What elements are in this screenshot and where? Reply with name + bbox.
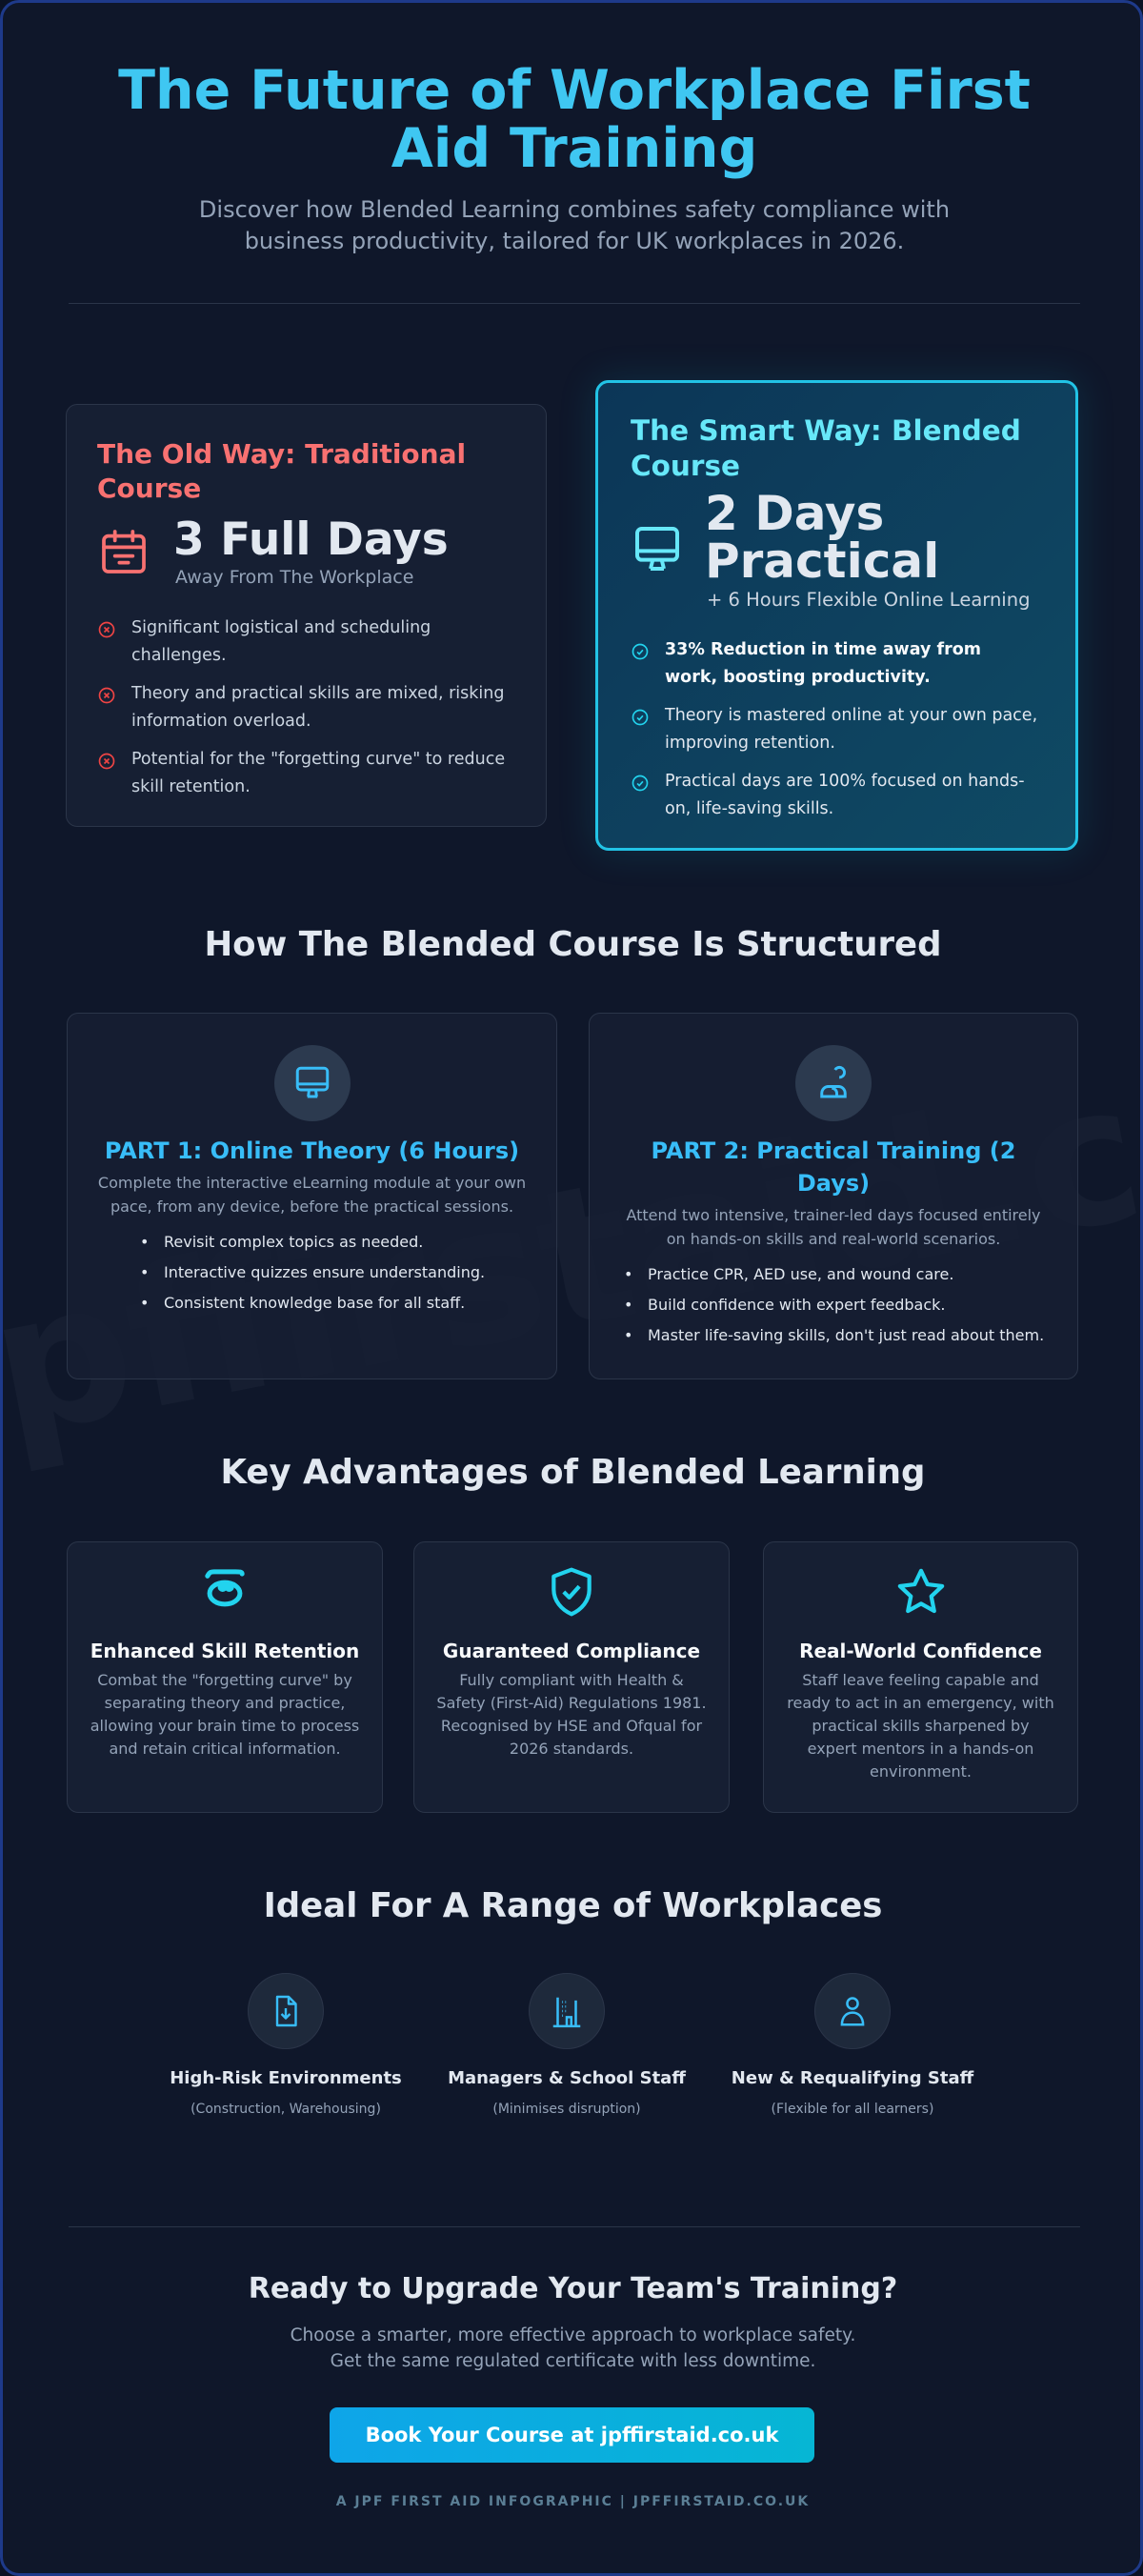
description: [787, 1671, 1054, 1781]
list: old way drawbacks: [99, 618, 505, 796]
part 1 bullets: [142, 1233, 485, 1312]
description: allowing your brain time to process: [90, 1717, 359, 1735]
heading: smart way: Course: [631, 450, 740, 482]
stat: 2 days practical: + 6 Hours Flexible Online Learning: [707, 589, 1030, 611]
cta text: Get the same regulated certificate with less downtime.: [331, 2351, 815, 2371]
cta button: Book Your Course at jpffirstaid.co.uk: [366, 2424, 778, 2446]
item: high-risk: (Construction, Warehousing): [190, 2102, 381, 2117]
part 2 bullets: Practice CPR, AED use, and wound care.: [648, 1265, 953, 1283]
heading: smart way: [631, 414, 1021, 482]
item: high-risk: High-Risk Environments: [170, 2068, 402, 2088]
heading: workplaces: Ideal For A Range of Workplaces: [264, 1886, 882, 1925]
heading: old way: [97, 438, 466, 504]
cta text: [291, 2325, 855, 2371]
title: Real-World Confidence: [799, 1640, 1042, 1662]
heading: old way: Course: [97, 473, 201, 504]
title: [118, 59, 1031, 180]
icon: monitor: [635, 527, 679, 571]
list: smart way benefits: 33% Reduction in time away from work, boosting productivity.: [665, 640, 981, 687]
item: managers: (Minimises disruption): [492, 2102, 641, 2117]
icon: eye: [205, 1569, 245, 1606]
list: old way drawbacks: Significant logistical and scheduling challenges.: [131, 618, 431, 665]
heading: old way: The Old Way: Traditional: [97, 438, 466, 470]
description: [90, 1671, 359, 1758]
heading: advantages: Key Advantages of Blended Learning: [221, 1453, 925, 1492]
part 2 bullets: Master life-saving skills, don't just read about them.: [648, 1326, 1044, 1344]
description: and retain critical information.: [109, 1740, 341, 1758]
icon: monitor: [274, 1045, 351, 1121]
title: Enhanced Skill Retention: [90, 1640, 359, 1662]
description: Safety (First-Aid) Regulations 1981.: [436, 1694, 707, 1712]
title: The Future of Workplace First: [118, 59, 1031, 122]
list: smart way benefits: [632, 640, 1037, 818]
description: Staff leave feeling capable and: [802, 1671, 1039, 1689]
description: 2026 standards.: [510, 1740, 633, 1758]
part 2 bullets: [626, 1265, 1044, 1344]
stat: 2 days practical: [635, 486, 1030, 611]
cta text: Choose a smarter, more effective approach to workplace safety.: [291, 2325, 855, 2345]
description: ready to act in an emergency, with: [787, 1694, 1054, 1712]
icon: shield: [551, 1568, 592, 1616]
title: Guaranteed Compliance: [443, 1640, 700, 1662]
icon: document: [248, 1973, 324, 2049]
description: Recognised by HSE and Ofqual for: [441, 1717, 702, 1735]
card: skill retention: [67, 1541, 383, 1813]
description: separating theory and practice,: [105, 1694, 345, 1712]
description: Fully compliant with Health &: [459, 1671, 684, 1689]
heading: structure: How The Blended Course Is Structured: [204, 925, 942, 964]
icon: building: [529, 1973, 605, 2049]
item: high-risk: [170, 1973, 402, 2117]
cta button: [330, 2407, 814, 2463]
icon: star: [897, 1568, 945, 1614]
stat: 2 days practical: 2 Days: [705, 486, 884, 541]
panel: part 2: [589, 1013, 1078, 1379]
item: managers: [448, 1973, 686, 2117]
stat: 3 full days: 3 Full Days: [173, 513, 449, 566]
part 1 description: Complete the interactive eLearning module at your own pace, from any device, before the practical sessions.: [98, 1174, 526, 1216]
panel: smart way: [595, 380, 1078, 851]
part 1 bullets: Revisit complex topics as needed.: [164, 1233, 423, 1251]
subtitle: [199, 196, 950, 254]
description: expert mentors in a hands-on: [808, 1740, 1033, 1758]
card: confidence: [763, 1541, 1078, 1813]
item: managers: Managers & School Staff: [448, 2068, 686, 2088]
part 1 title: PART 1: Online Theory (6 Hours): [105, 1137, 519, 1164]
stat: 2 days practical: Practical: [705, 533, 939, 589]
list: old way drawbacks: Potential for the "forgetting curve" to reduce skill retention.: [131, 750, 505, 796]
list: old way drawbacks: Theory and practical skills are mixed, risking information overload.: [131, 684, 504, 731]
subtitle: business productivity, tailored for UK workplaces in 2026.: [245, 228, 904, 254]
icon: person: [814, 1973, 891, 2049]
part 2 bullets: Build confidence with expert feedback.: [648, 1296, 946, 1314]
subtitle: Discover how Blended Learning combines safety compliance with: [199, 196, 950, 223]
icon: calendar: [102, 530, 146, 574]
list: smart way benefits: Theory is mastered online at your own pace, improving retention.: [665, 706, 1037, 753]
heading: smart way: The Smart Way: Blended: [631, 414, 1021, 447]
title: Aid Training: [391, 117, 757, 180]
footer: A JPF FIRST AID INFOGRAPHIC | JPFFIRSTAID.CO.UK: [336, 2494, 810, 2509]
item: new staff: [732, 1973, 973, 2117]
part 1 bullets: Interactive quizzes ensure understanding.: [164, 1263, 485, 1281]
part 1 bullets: Consistent knowledge base for all staff.: [164, 1294, 465, 1312]
panel: part 1: [67, 1013, 557, 1379]
description: [436, 1671, 707, 1758]
description: Combat the "forgetting curve" by: [97, 1671, 352, 1689]
description: practical skills sharpened by: [812, 1717, 1030, 1735]
description: environment.: [870, 1762, 972, 1781]
item: new staff: (Flexible for all learners): [772, 2102, 933, 2117]
part 2 title: PART 2: Practical Training (2 Days): [652, 1137, 1015, 1197]
cta heading: Ready to Upgrade Your Team's Training?: [249, 2272, 897, 2305]
card: compliance: [413, 1541, 730, 1813]
item: new staff: New & Requalifying Staff: [732, 2068, 973, 2088]
list: smart way benefits: Practical days are 100% focused on hands-on, life-saving skills.: [665, 772, 1025, 818]
panel: old way: [66, 404, 547, 827]
part 2 description: Attend two intensive, trainer-led days focused entirely on hands-on skills and real-world scenarios.: [626, 1206, 1041, 1248]
stat: 3 full days: [102, 513, 449, 588]
stat: 3 full days: Away From The Workplace: [175, 567, 413, 588]
icon: trainer: [795, 1045, 872, 1121]
